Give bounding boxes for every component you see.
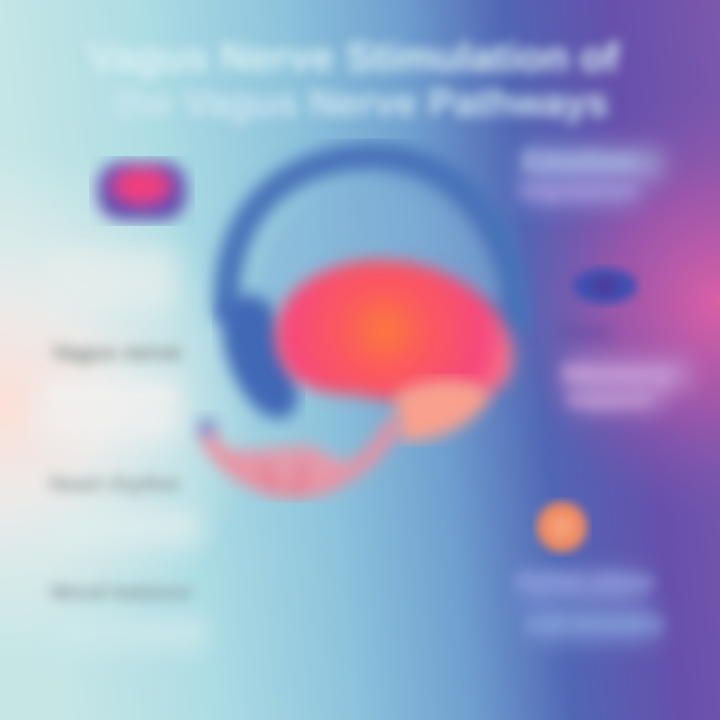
title: Vagus Nerve Stimulation of — [88, 34, 619, 80]
left text block 2 — [44, 472, 208, 552]
left text block 3: Calm and relaxed — [57, 621, 198, 640]
brain — [276, 260, 513, 401]
lower nerve curve — [197, 418, 395, 495]
right text block middle: Memory — [563, 358, 670, 389]
right text block middle: Focus — [561, 322, 611, 341]
left text block 1: Vagus nerve — [52, 340, 182, 365]
left text block 3: Mood balance — [51, 581, 191, 604]
blue brainstem shape — [220, 295, 298, 418]
title: the Vagus Nerve Pathways — [114, 82, 608, 125]
brain lower peach lobe — [395, 380, 490, 441]
left text block 1 — [44, 242, 189, 446]
right text block bottom — [510, 560, 670, 652]
right text block middle — [552, 322, 700, 423]
head outline arc — [227, 156, 518, 330]
left text block 1: Signals to brain — [48, 384, 176, 403]
right text block bottom: and recovery — [526, 610, 663, 635]
right text block top: Emotion — [523, 145, 635, 176]
left text block 2: Lower stress level — [49, 515, 188, 532]
icon: orange sun — [532, 497, 592, 557]
title — [88, 34, 626, 130]
right text block middle: support — [567, 386, 649, 411]
icon: heart badge — [89, 156, 195, 226]
illustration: head, brain and nerve — [189, 138, 534, 503]
left text block 2: Heart rhythm — [49, 473, 180, 496]
right text block top — [510, 135, 674, 216]
icon: eye — [569, 264, 643, 308]
right text block bottom: Better sleep — [516, 568, 653, 595]
right text block top: regulation — [519, 177, 635, 204]
left text block 3 — [47, 580, 211, 655]
